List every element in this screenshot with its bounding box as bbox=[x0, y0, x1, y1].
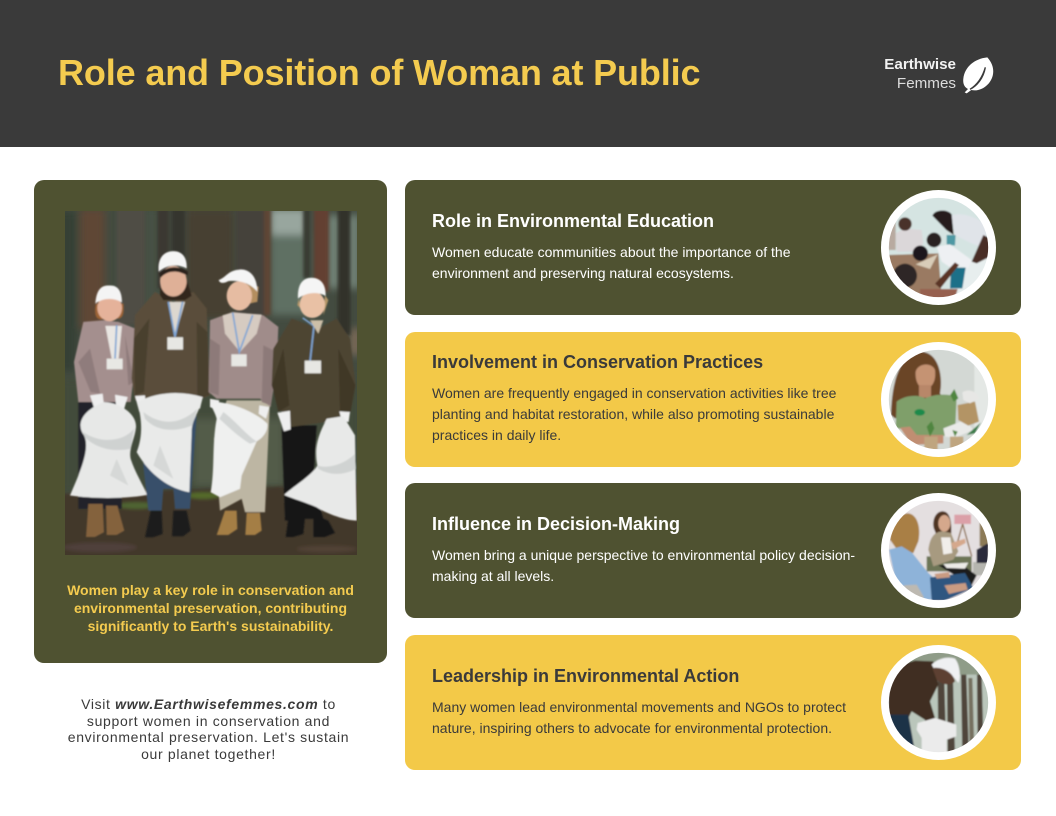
body text: nature, inspiring others to advocate for environmental protection. bbox=[432, 720, 832, 736]
photo: woman bending over a white sack bbox=[881, 645, 996, 760]
body text bbox=[432, 547, 855, 584]
photo: two women in discussion bbox=[881, 493, 996, 608]
photo: four women collecting litter in a forest bbox=[65, 211, 357, 555]
icon: leaf bbox=[963, 57, 994, 94]
body text: Women bring a unique perspective to environmental policy decision- bbox=[432, 547, 855, 563]
logo wordmark: Femmes bbox=[897, 75, 956, 92]
heading: Role in Environmental Education bbox=[432, 211, 714, 231]
body text: planting and habitat restoration, while also promoting sustainable bbox=[432, 406, 834, 422]
photo caption: environmental preservation, contributing bbox=[74, 600, 347, 616]
panel: involvement in conservation practices bbox=[405, 332, 1021, 467]
body text bbox=[432, 385, 836, 443]
person 1 bbox=[70, 285, 147, 537]
heading: Leadership in Environmental Action bbox=[432, 666, 739, 686]
body text: making at all levels. bbox=[432, 568, 554, 584]
body text: Many women lead environmental movements and NGOs to protect bbox=[432, 699, 846, 715]
heading: Influence in Decision-Making bbox=[432, 514, 680, 534]
title: Role and Position of Woman at Public bbox=[58, 52, 700, 93]
call to action text bbox=[68, 696, 349, 762]
photo: woman tending seedlings bbox=[881, 342, 996, 457]
panel: role in environmental education bbox=[405, 180, 1021, 315]
logo wordmark bbox=[884, 56, 956, 92]
call to action text: environmental preservation. Let's sustain bbox=[68, 729, 349, 745]
person 3 bbox=[209, 269, 278, 535]
person 4 bbox=[272, 278, 357, 537]
body text: practices in daily life. bbox=[432, 427, 561, 443]
person 2 bbox=[132, 251, 210, 537]
panel: main photo and statement bbox=[34, 180, 387, 663]
call to action text: support women in conservation and bbox=[87, 713, 330, 729]
call to action text: Visit www.Earthwisefemmes.com to bbox=[81, 696, 336, 712]
photo caption: significantly to Earth's sustainability. bbox=[88, 618, 333, 634]
body text: Women educate communities about the importance of the bbox=[432, 244, 790, 260]
header band bbox=[0, 0, 1056, 147]
body text: Women are frequently engaged in conservation activities like tree bbox=[432, 385, 836, 401]
logo wordmark: Earthwise bbox=[884, 56, 956, 73]
panel: leadership in environmental action bbox=[405, 635, 1021, 770]
logo bbox=[884, 56, 994, 94]
body text bbox=[432, 699, 846, 736]
photo caption bbox=[67, 582, 354, 634]
heading: Involvement in Conservation Practices bbox=[432, 352, 763, 372]
panel: influence in decision-making bbox=[405, 483, 1021, 618]
photo: children learning around a table bbox=[881, 190, 996, 305]
photo caption: Women play a key role in conservation and bbox=[67, 582, 354, 598]
body text: environment and preserving natural ecosystems. bbox=[432, 265, 734, 281]
call to action text: our planet together! bbox=[141, 746, 276, 762]
body text bbox=[432, 244, 790, 281]
